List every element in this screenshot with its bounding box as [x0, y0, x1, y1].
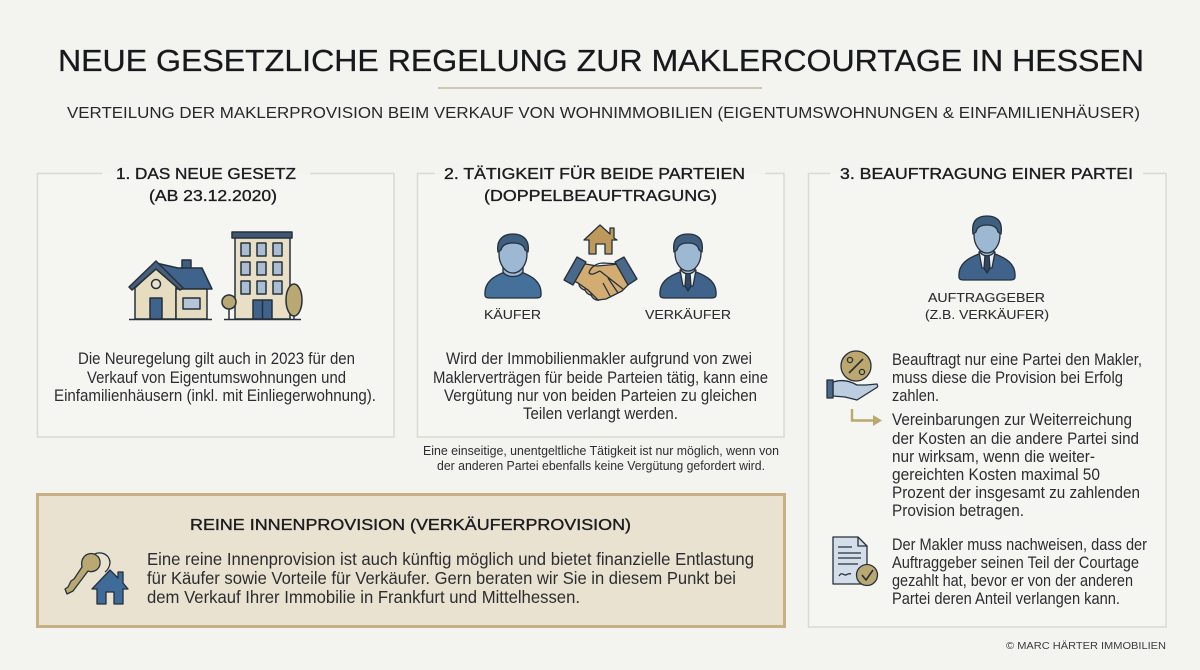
- icon: document with check: [833, 537, 878, 586]
- text: Beauftragt: zahlen.: [892, 387, 939, 405]
- icon: house and apartment building: [129, 232, 302, 320]
- text: Vereinbarungen: nur wirksam, wenn die weiter-: [892, 448, 1095, 466]
- heading 1: 1. DAS NEUE GESETZ: [116, 166, 296, 183]
- text: Nachweis: Auftraggeber seinen Teil der Courtage: [892, 554, 1139, 572]
- subtitle: VERTEILUNG DER MAKLERPROVISION BEIM VERKAUF VON WOHNIMMOBILIEN (EIGENTUMSWOHNUNGEN & EINFAMILIENHÄUSER): [67, 105, 1140, 122]
- label: Käufer: KÄUFER: [484, 307, 541, 322]
- note: einseitige Tätigkeit: der anderen Partei ebenfalls keine Vergütung gefordert wird.: [437, 458, 765, 473]
- text: Vereinbarungen: gereichten Kosten maximal 50: [892, 466, 1100, 484]
- panel background: [38, 494, 784, 626]
- note: einseitige Tätigkeit: [423, 443, 779, 473]
- text: Doppeltätigkeit: [433, 350, 768, 423]
- panel: Beauftragung einer Partei: [808, 166, 1166, 627]
- icon: Auftraggeber person: [959, 216, 1015, 280]
- text: Doppeltätigkeit: Teilen verlangt werden.: [523, 405, 678, 423]
- panel frame 3: [808, 174, 1166, 627]
- text: Neuregelung: Einfamilienhäusern (inkl. mit Einliegerwohnung).: [54, 387, 376, 405]
- heading 3: 3. BEAUFTRAGUNG EINER PARTEI: [840, 166, 1133, 183]
- text: Neuregelung: Die Neuregelung gilt auch in 2023 für den: [78, 350, 355, 368]
- copyright: © MARC HÄRTER IMMOBILIEN: [1006, 640, 1166, 652]
- text: Beauftragt: muss diese die Provision bei Erfolg: [892, 369, 1123, 387]
- icon: percent coin on hand: [827, 351, 878, 400]
- text: Innenprovision: Eine reine Innenprovision ist auch künftig möglich und bietet finanzielle Entlastung: [147, 549, 754, 569]
- text: Beauftragt: [892, 351, 1142, 405]
- text: Doppeltätigkeit: Vergütung nur von beiden Parteien zu gleichen: [444, 387, 757, 405]
- text: Beauftragt: Beauftragt nur eine Partei den Makler,: [892, 351, 1142, 369]
- text: Innenprovision: dem Verkauf Ihrer Immobilie in Frankfurt und Mittelhessen.: [147, 587, 580, 607]
- text: Neuregelung: Verkauf von Eigentumswohnungen und: [87, 369, 346, 387]
- text: Innenprovision: [147, 549, 754, 607]
- text: Vereinbarungen: Prozent der insgesamt zu zahlenden: [892, 484, 1140, 502]
- arrow: Weiterreichung: [852, 409, 882, 426]
- panel frame 1: [38, 174, 394, 437]
- text: Innenprovision: für Käufer sowie Vorteile für Verkäufer. Gern beraten wir Sie in diesem Punkt bei: [147, 568, 736, 588]
- text: Nachweis: [892, 536, 1147, 608]
- label: Auftraggeber: (Z.B. VERKÄUFER): [925, 307, 1049, 322]
- panel frame 2: [418, 174, 784, 437]
- heading: Innenprovision: REINE INNENPROVISION (VERKÄUFERPROVISION): [190, 516, 631, 534]
- text: Vereinbarungen: Vereinbarungen zur Weiterreichung: [892, 411, 1132, 429]
- text: Neuregelung: [54, 350, 376, 405]
- text: Doppeltätigkeit: Wird der Immobilienmakler aufgrund von zwei: [446, 350, 752, 368]
- heading 1: (AB 23.12.2020): [149, 188, 277, 205]
- text: Nachweis: Partei deren Anteil verlangen kann.: [892, 590, 1120, 608]
- heading 2: [444, 165, 745, 205]
- heading 2: 2. TÄTIGKEIT FÜR BEIDE PARTEIEN: [444, 165, 745, 183]
- text: Vereinbarungen: der Kosten an die andere Partei sind: [892, 430, 1139, 448]
- icon: Verkäufer person: [660, 234, 716, 298]
- panel: Doppelbeauftragung: [418, 165, 784, 437]
- text: Nachweis: gezahlt hat, bevor er von der anderen: [892, 572, 1133, 590]
- icon: Käufer person: [485, 234, 541, 298]
- title: NEUE GESETZLICHE REGELUNG ZUR MAKLERCOURTAGE IN HESSEN: [58, 43, 1144, 78]
- text: Vereinbarungen: Provision betragen.: [892, 502, 1024, 520]
- text: Nachweis: Der Makler muss nachweisen, dass der: [892, 536, 1147, 554]
- panel: das neue Gesetz: [38, 166, 394, 437]
- heading 1: [116, 166, 296, 205]
- text: Vereinbarungen: [892, 411, 1140, 520]
- heading 2: (DOPPELBEAUFTRAGUNG): [484, 188, 717, 205]
- icon: handshake: [564, 257, 637, 302]
- label: Auftraggeber: AUFTRAGGEBER: [928, 290, 1045, 305]
- panel: Innenprovision: [38, 494, 784, 626]
- label: Auftraggeber: [925, 290, 1049, 322]
- text: Doppeltätigkeit: Maklerverträgen für beide Parteien tätig, kann eine: [433, 369, 768, 387]
- note: einseitige Tätigkeit: Eine einseitige, unentgeltliche Tätigkeit ist nur möglich, wenn von: [423, 443, 779, 458]
- icon: key and house: [65, 553, 128, 604]
- icon: house above handshake: [584, 225, 617, 254]
- label: Verkäufer: VERKÄUFER: [645, 307, 731, 322]
